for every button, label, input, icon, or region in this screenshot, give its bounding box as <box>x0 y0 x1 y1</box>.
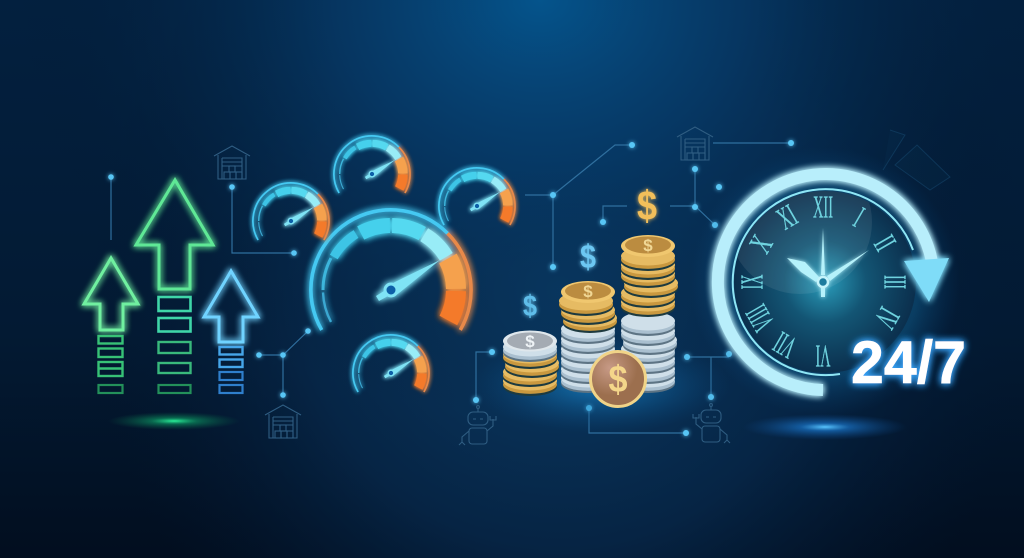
clock numerals: III <box>878 275 914 289</box>
gauges group <box>253 136 515 392</box>
coin stack: small <box>503 330 559 396</box>
floor glow: blue <box>743 414 907 440</box>
clock face <box>734 191 916 373</box>
clock numerals: XI <box>770 197 803 236</box>
clock ring arrow <box>718 174 949 390</box>
icon: robot right <box>693 404 730 443</box>
coin stack: tall <box>621 235 678 393</box>
icon: warehouse bottom <box>265 405 301 438</box>
icon: robot left <box>459 406 496 445</box>
gauge: main <box>311 210 471 330</box>
big coin <box>590 352 646 406</box>
clock hands <box>787 228 869 297</box>
network lines and nodes <box>108 140 794 436</box>
gauge: bottom <box>353 335 429 392</box>
arrow: blue <box>204 271 258 393</box>
dollar sign: blue small: $ <box>523 290 537 323</box>
gauge: top <box>334 136 410 193</box>
dollar sign: gold: $ <box>637 182 657 229</box>
label: 24/7: 24/7 <box>851 329 966 396</box>
clock numerals: XII <box>813 188 833 224</box>
coin stack: small: $ <box>525 332 535 351</box>
coin stacks group <box>470 235 730 433</box>
arrows group <box>84 180 258 393</box>
clock group <box>690 130 966 417</box>
inner ring <box>733 189 913 375</box>
gauge: upper right <box>439 168 515 225</box>
icon: warehouse top left <box>214 146 250 179</box>
gauge: upper left <box>253 183 329 240</box>
clock numerals: IV <box>867 301 908 335</box>
coin stack: medium <box>559 281 617 393</box>
floor glow: green <box>108 412 240 430</box>
arrow: centre green <box>136 180 213 393</box>
arrow: left green <box>84 258 138 393</box>
big coin: $ <box>608 359 628 401</box>
clock numerals: IX <box>734 274 770 290</box>
clock numerals: I <box>848 200 870 233</box>
clock numerals: II <box>867 229 904 257</box>
coin stack: medium: $ <box>583 282 593 301</box>
clock numerals: VII <box>767 325 802 366</box>
clock numerals: X <box>741 229 780 259</box>
dollar sign: blue middle: $ <box>580 238 596 275</box>
clock numerals: VIII <box>738 299 781 338</box>
clock numerals: VI <box>816 338 830 374</box>
clock numerals <box>734 188 914 374</box>
coin stack: tall: $ <box>643 236 653 255</box>
icon: warehouse top right <box>677 127 713 160</box>
